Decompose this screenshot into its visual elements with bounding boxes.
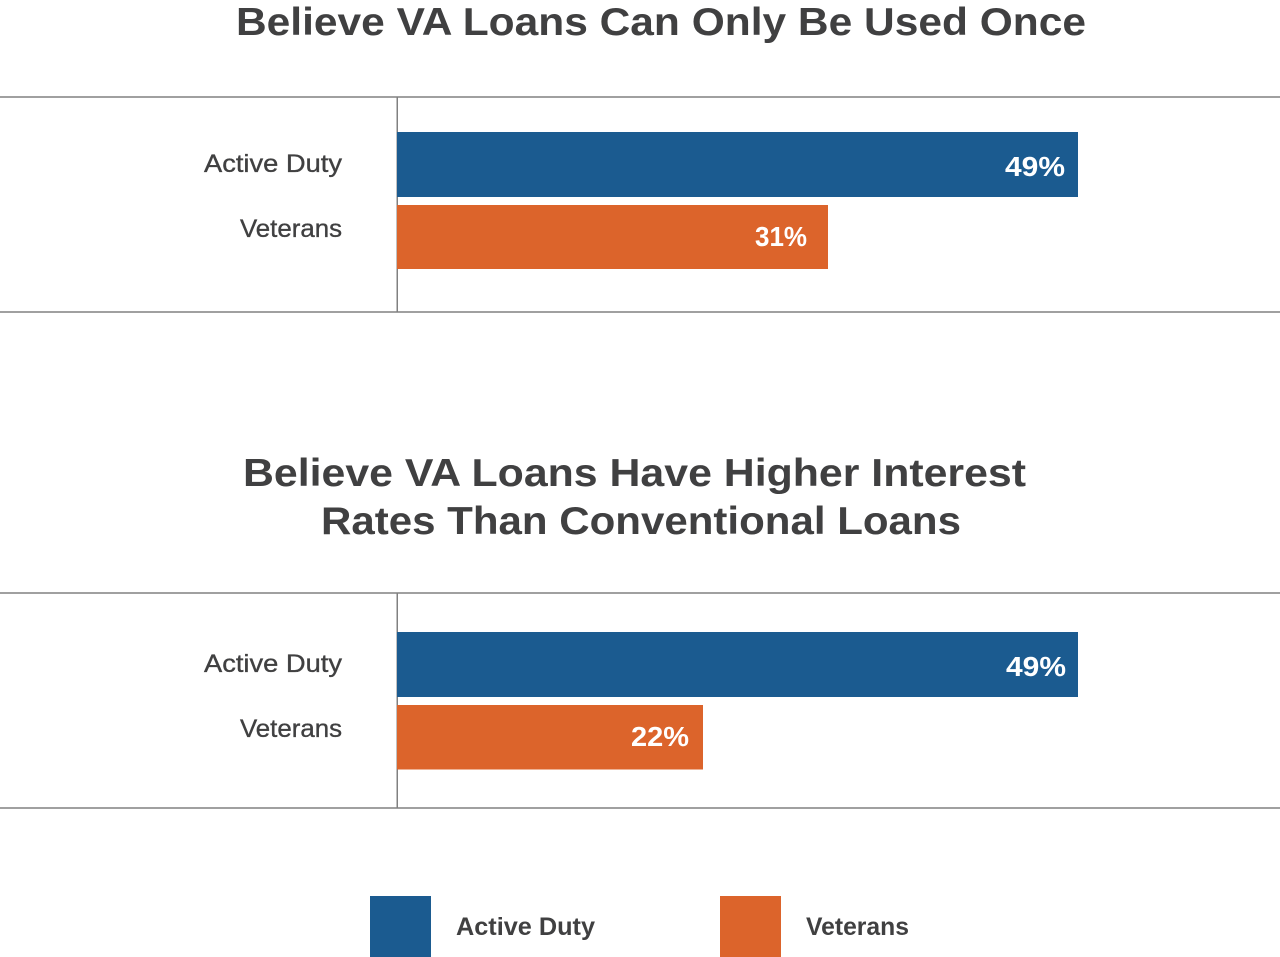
legend item: veterans: Veterans bbox=[806, 913, 909, 941]
bar: veterans 31%: 31% bbox=[755, 221, 807, 252]
legend item: active duty: Active Duty bbox=[456, 913, 595, 941]
legend item: veterans bbox=[720, 896, 909, 957]
label: veterans: Veterans bbox=[240, 715, 342, 743]
title: chart 2 bbox=[243, 452, 1026, 543]
title: chart 1: Believe VA Loans Can Only Be Used Once bbox=[236, 1, 1086, 44]
label: veterans: Veterans bbox=[240, 215, 342, 243]
legend item: active duty bbox=[370, 896, 595, 957]
panel: chart 2 bbox=[0, 592, 1280, 809]
label: active duty: Active Duty bbox=[204, 650, 343, 678]
bar: veterans 22%: 22% bbox=[631, 721, 689, 752]
bar: active duty 49%: 49% bbox=[1006, 651, 1066, 682]
bar: veterans 22% bbox=[397, 705, 703, 770]
title: chart 2: Rates Than Conventional Loans bbox=[321, 500, 961, 543]
bar: active duty 49%: 49% bbox=[1005, 151, 1065, 182]
title: chart 2: Believe VA Loans Have Higher Interest bbox=[243, 452, 1026, 495]
bar: active duty 49% bbox=[397, 132, 1078, 197]
panel: chart 1 bbox=[0, 96, 1280, 313]
legend bbox=[370, 896, 909, 957]
bar: veterans 31% bbox=[397, 205, 828, 269]
label: active duty: Active Duty bbox=[204, 150, 343, 178]
bar: active duty 49% bbox=[397, 632, 1078, 697]
